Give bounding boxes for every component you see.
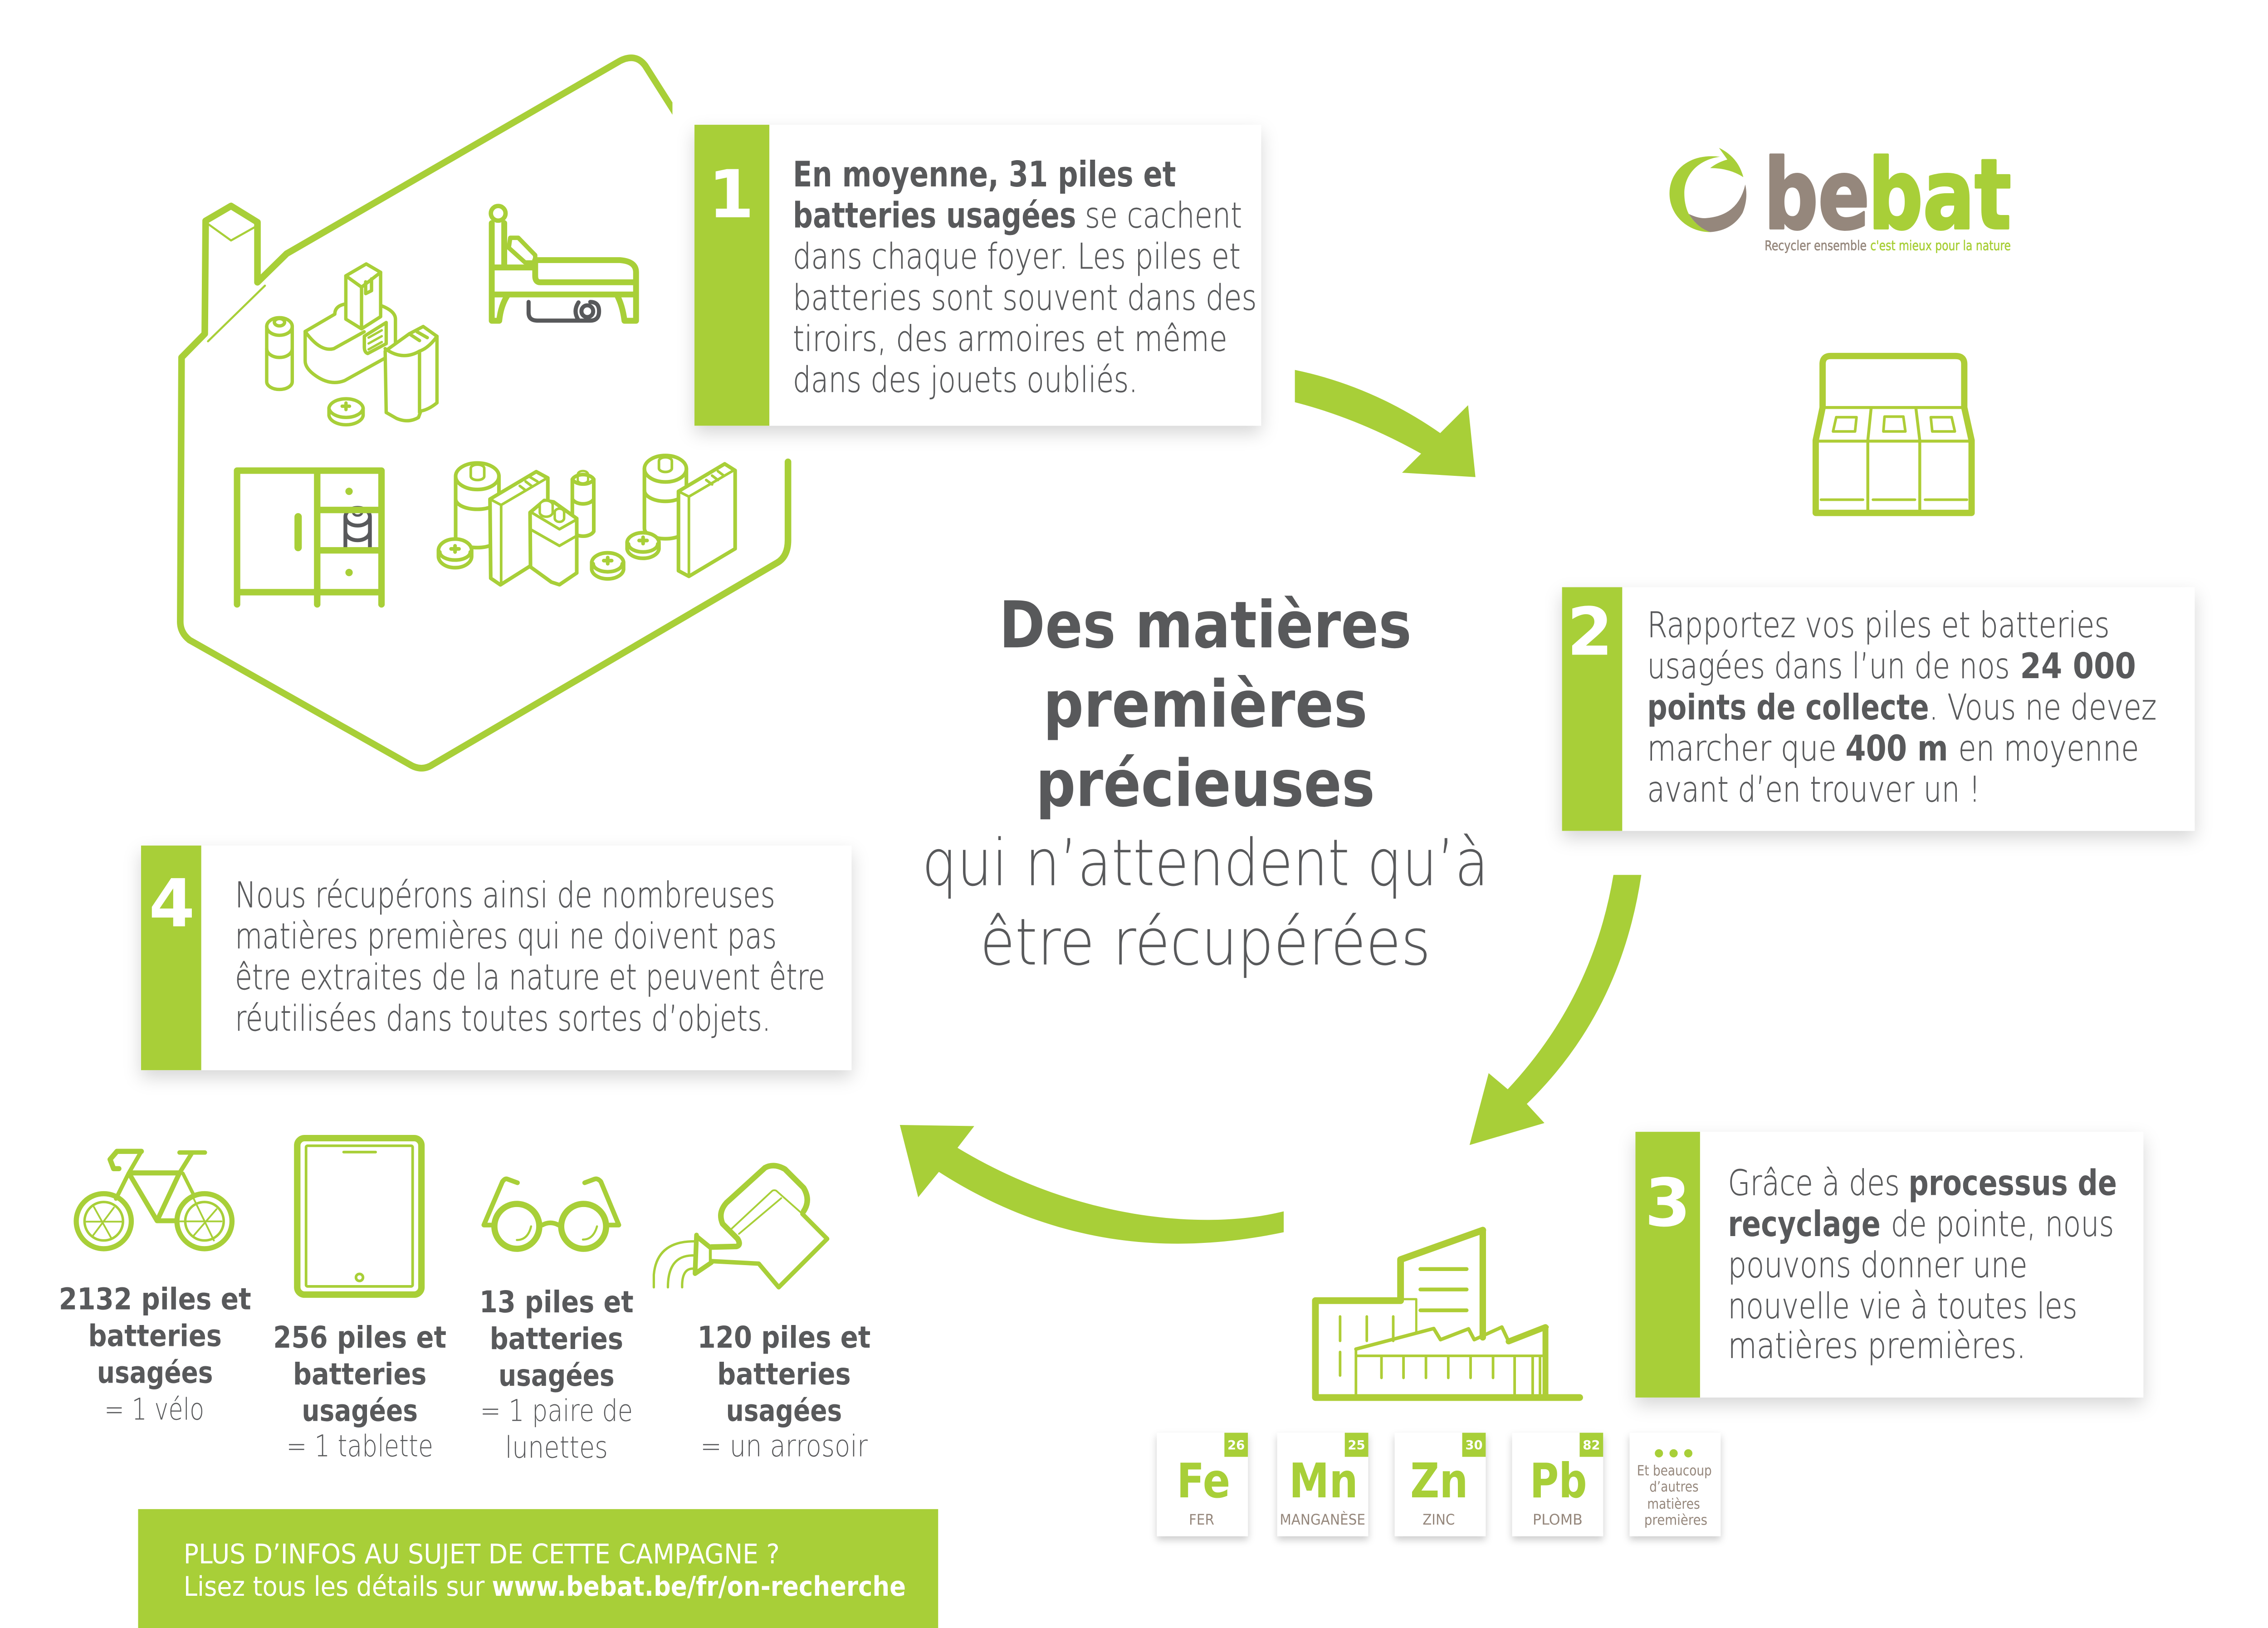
step 1 number: 1 — [708, 156, 754, 233]
stat: tablet: 256 piles et — [273, 1320, 446, 1355]
icon: recycling factory — [1315, 1230, 1579, 1398]
card: other materials: premières — [1644, 1512, 1707, 1528]
step 3 number: 3 — [1645, 1165, 1691, 1242]
stat: glasses — [479, 1284, 634, 1465]
arrow 2 to 3 — [1470, 875, 1641, 1145]
icon: battery group — [439, 455, 735, 585]
step 2 text: 24 000 — [2020, 646, 2136, 687]
stat: bicycle: 2132 piles et — [59, 1281, 251, 1317]
step 4 text — [235, 875, 825, 1039]
step 2 text: 400 m — [1845, 728, 1948, 769]
card: other materials: d’autres — [1649, 1479, 1699, 1495]
arrow 1 to 2 — [1295, 370, 1476, 477]
chimney detail — [205, 222, 265, 341]
stat: bicycle — [59, 1281, 251, 1427]
stat: glasses: lunettes — [505, 1430, 608, 1465]
logo tagline: c'est mieux pour la nature — [1870, 238, 2011, 253]
icon: bed — [491, 206, 636, 321]
step 2 text — [1647, 605, 2156, 810]
card: zinc: ZINC — [1422, 1511, 1455, 1528]
card: zinc: Zn — [1410, 1453, 1468, 1509]
stat: tablet: usagées — [302, 1393, 418, 1428]
step 1 text: se cachent — [1085, 196, 1242, 236]
icon: collection bin — [1816, 356, 1972, 513]
central title: être récupérées — [980, 904, 1431, 980]
stat: glasses: 13 piles et — [479, 1284, 634, 1320]
card: lead — [1512, 1433, 1603, 1536]
step 3 text: recyclage — [1728, 1204, 1881, 1245]
card: iron: 26 — [1227, 1438, 1245, 1452]
step 4 text: réutilisées dans toutes sortes d’objets. — [235, 998, 771, 1039]
central title: précieuses — [1036, 746, 1375, 821]
step 3 text: pouvons donner une — [1728, 1245, 2028, 1286]
step 4 text: être extraites de la nature et peuvent être — [235, 957, 825, 998]
step 2 text: en moyenne — [1958, 728, 2139, 769]
card: manganese: 25 — [1348, 1438, 1365, 1452]
step 3 text: nouvelle vie à toutes les — [1728, 1286, 2077, 1327]
central title: Des matières — [999, 587, 1412, 663]
step 1 text: En moyenne, 31 piles et — [793, 154, 1176, 195]
step 4 text: matières premières qui ne doivent pas — [235, 916, 777, 957]
card: iron — [1157, 1433, 1248, 1536]
card: lead: Pb — [1530, 1453, 1587, 1509]
card: iron: FER — [1189, 1511, 1214, 1528]
card: other materials: Et beaucoup — [1637, 1462, 1712, 1479]
step 2 number: 2 — [1567, 594, 1613, 670]
step 2 text: usagées dans l’un de nos — [1647, 646, 2010, 687]
logo mark — [1670, 148, 1746, 232]
card: lead: PLOMB — [1533, 1511, 1583, 1528]
step 1 panel — [694, 125, 1261, 426]
logo tagline: Recycler ensemble — [1765, 238, 1867, 253]
house outline — [180, 58, 788, 768]
stat: glasses: usagées — [499, 1358, 615, 1393]
icon: glasses — [484, 1179, 619, 1249]
stat: bicycle: = 1 vélo — [104, 1391, 204, 1427]
stat: watering can: 120 piles et — [697, 1320, 870, 1355]
step 4 text: Nous récupérons ainsi de nombreuses — [235, 875, 775, 916]
step 4 panel — [141, 846, 851, 1070]
central title: qui n’attendent qu’à — [922, 825, 1489, 900]
house illustration — [180, 58, 788, 768]
stat: tablet — [273, 1320, 446, 1463]
stat: watering can: usagées — [726, 1393, 842, 1428]
central title — [922, 587, 1489, 980]
step 1 text — [793, 154, 1257, 401]
step 2 text: . Vous ne devez — [1929, 687, 2156, 728]
icon: watering can — [654, 1166, 827, 1287]
arrow 3 to 4 — [900, 1125, 1284, 1244]
card: manganese: Mn — [1289, 1453, 1358, 1509]
icon: tablet — [297, 1138, 421, 1295]
stat: watering can: = un arrosoir — [700, 1428, 868, 1463]
central title: premières — [1043, 667, 1368, 742]
card: lead: 82 — [1583, 1438, 1600, 1452]
card: zinc: 30 — [1465, 1438, 1483, 1452]
step 2 text: avant d’en trouver un ! — [1647, 769, 1980, 810]
icon: power tool battery cluster — [267, 264, 437, 425]
step 2 text: points de collecte — [1647, 687, 1929, 728]
campaign banner: Lisez tous les détails sur — [184, 1571, 485, 1603]
step 2 text: Rapportez vos piles et batteries — [1647, 605, 2110, 646]
step 3 text — [1728, 1163, 2117, 1367]
card: iron: Fe — [1177, 1453, 1230, 1509]
card: zinc — [1395, 1433, 1486, 1536]
step 2 panel — [1562, 587, 2195, 831]
step 3 panel — [1635, 1132, 2143, 1398]
step 1 text: dans des jouets oubliés. — [793, 360, 1138, 401]
logo wordmark — [1764, 139, 2011, 251]
step 1 text: batteries sont souvent dans des — [793, 278, 1257, 318]
logo wordmark: bat — [1868, 139, 2011, 251]
icon: bicycle — [76, 1151, 232, 1249]
step 3 text: de pointe, nous — [1891, 1204, 2114, 1245]
step 3 text: processus de — [1908, 1163, 2117, 1203]
stat: watering can — [697, 1320, 870, 1463]
stat: tablet: = 1 tablette — [286, 1428, 433, 1463]
campaign banner: PLUS D’INFOS AU SUJET DE CETTE CAMPAGNE ? — [184, 1539, 780, 1570]
element cards — [1157, 1433, 1721, 1536]
stat: glasses: = 1 paire de — [480, 1393, 633, 1428]
step 3 text: matières premières. — [1728, 1326, 2026, 1367]
step 1 text: dans chaque foyer. Les piles et — [793, 236, 1241, 277]
stat: watering can: batteries — [717, 1356, 851, 1392]
logo tagline — [1765, 238, 2011, 253]
card: other materials: matières — [1647, 1496, 1700, 1512]
card: other materials — [1630, 1433, 1721, 1536]
card: manganese: MANGANÈSE — [1280, 1511, 1365, 1528]
card: manganese — [1277, 1433, 1368, 1536]
icon: cabinet with battery — [237, 471, 381, 604]
step 1 text: tiroirs, des armoires et même — [793, 318, 1227, 359]
stat: bicycle: usagées — [97, 1355, 213, 1390]
stat: tablet: batteries — [293, 1356, 426, 1392]
logo wordmark: be — [1764, 139, 1870, 251]
stat: glasses: batteries — [490, 1321, 623, 1356]
step 3 text: Grâce à des — [1728, 1163, 1900, 1203]
step 4 number: 4 — [149, 865, 195, 942]
step 1 text: batteries usagées — [793, 196, 1076, 236]
campaign banner — [138, 1509, 938, 1628]
bebat logo — [1670, 139, 2011, 253]
stat: bicycle: batteries — [88, 1318, 222, 1354]
step 2 text: marcher que — [1647, 728, 1837, 769]
campaign banner: www.bebat.be/fr/on-recherche — [492, 1571, 906, 1603]
